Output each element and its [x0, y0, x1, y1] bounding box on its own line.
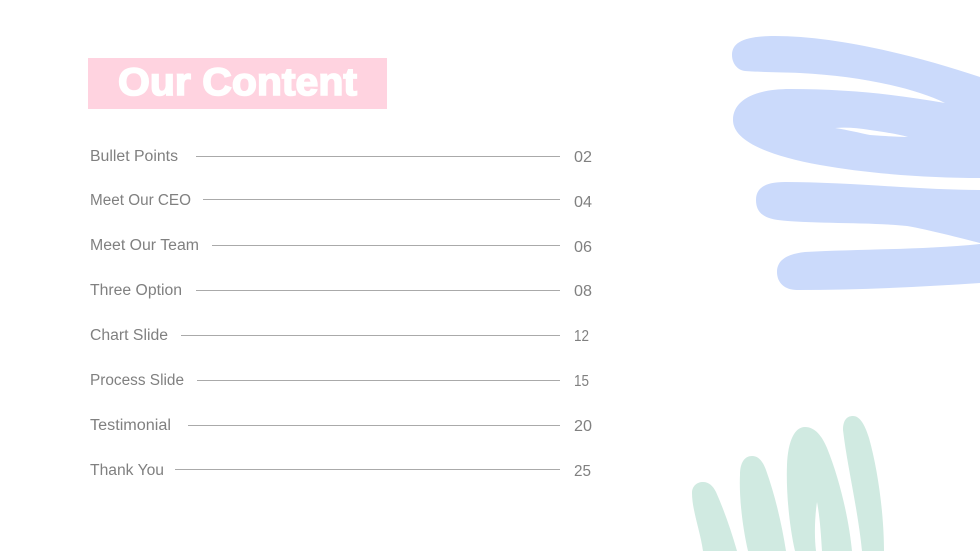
contents row: Testimonial: 20 — [574, 418, 592, 435]
contents row: Meet Our Team: Meet Our Team — [90, 237, 199, 254]
title banner — [88, 58, 387, 109]
contents row: Three Option: 08 — [574, 283, 592, 300]
decorative blue brush strokes — [732, 36, 980, 290]
contents row: Meet Our Team: 06 — [574, 239, 592, 256]
contents row: Chart Slide: Chart Slide — [90, 327, 168, 344]
contents row: Thank You: Thank You — [90, 462, 164, 479]
contents row: Thank You — [90, 462, 591, 480]
contents row: Bullet Points — [90, 148, 592, 166]
contents row: Three Option — [90, 282, 592, 300]
contents row: Thank You: 25 — [574, 463, 591, 480]
title banner: Our Content — [118, 61, 357, 104]
contents row: Process Slide — [90, 372, 589, 390]
contents row: Three Option: Three Option — [90, 282, 182, 299]
contents row: Testimonial: Testimonial — [90, 417, 171, 434]
contents row: Meet Our Team — [90, 237, 592, 256]
contents row: Meet Our CEO: 04 — [574, 194, 592, 211]
contents row: Bullet Points: 02 — [574, 149, 592, 166]
contents row: Process Slide: 15 — [574, 373, 589, 390]
contents row: Chart Slide — [90, 327, 589, 345]
contents row: Testimonial — [90, 417, 592, 435]
contents row: Meet Our CEO — [90, 192, 592, 211]
contents row: Chart Slide: 12 — [574, 328, 589, 345]
contents row: Meet Our CEO: Meet Our CEO — [90, 192, 191, 209]
contents row: Process Slide: Process Slide — [90, 372, 184, 389]
decorative green brush strokes — [692, 416, 884, 551]
contents row: Bullet Points: Bullet Points — [90, 148, 178, 165]
